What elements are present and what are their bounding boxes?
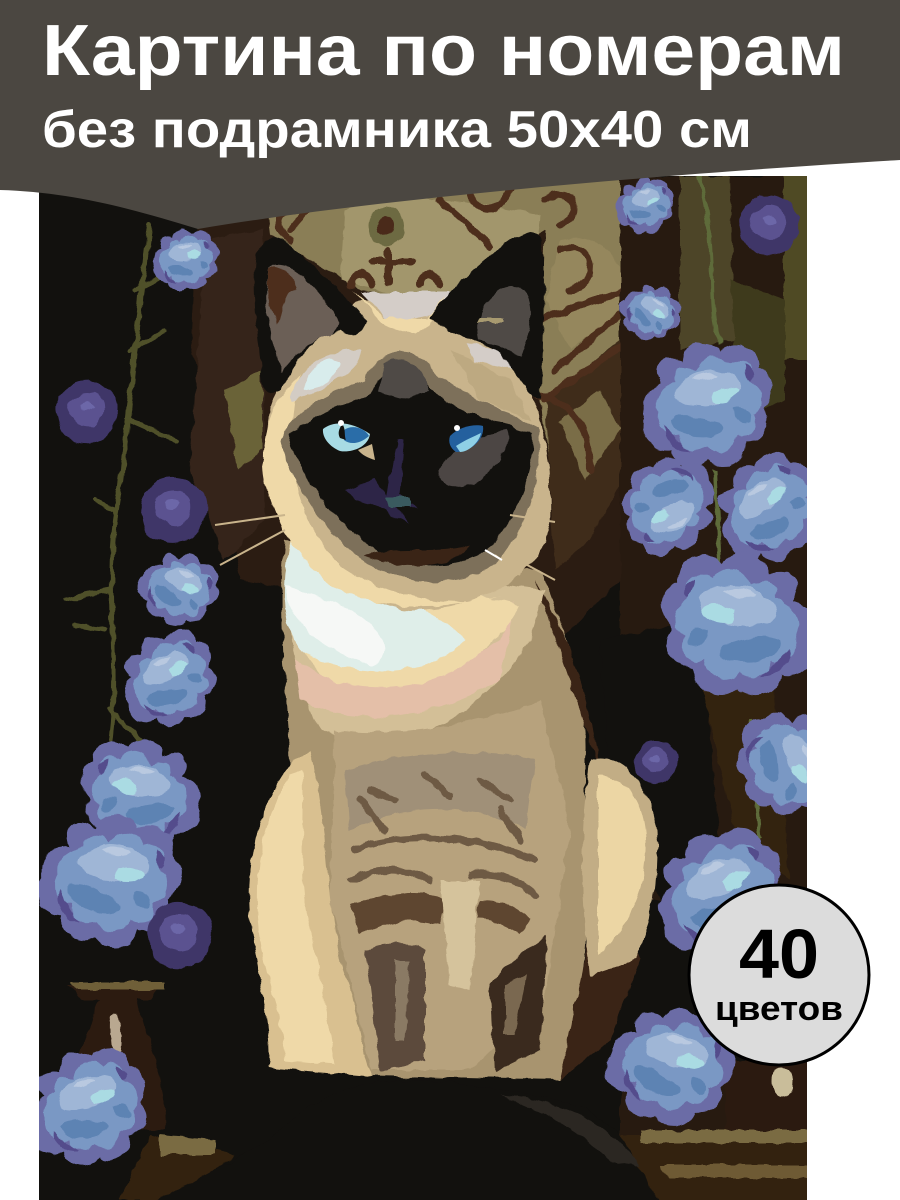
badge: 40 colours: 40 bbox=[739, 915, 819, 993]
header banner bbox=[0, 0, 900, 229]
right dark column with olive strip bbox=[618, 176, 807, 1136]
ornamental wall background bbox=[190, 176, 645, 640]
badge: 40 colours: цветов bbox=[715, 990, 843, 1028]
flowers right bbox=[604, 178, 807, 1126]
badge: 40 colours bbox=[689, 885, 869, 1065]
title: Картина по номерам bbox=[42, 11, 845, 91]
flowers left bbox=[39, 228, 220, 1166]
cat head fur bbox=[263, 290, 550, 610]
left vines bbox=[65, 225, 175, 740]
right ledge bbox=[610, 1130, 820, 1200]
cat eyes bbox=[323, 420, 483, 460]
cat whiskers bbox=[215, 515, 555, 580]
cat ears bbox=[254, 232, 544, 398]
cat face mask bbox=[280, 352, 539, 581]
subtitle: без подрамника 50х40 см bbox=[42, 101, 752, 159]
left vase and ledge bbox=[68, 982, 235, 1200]
cat body bbox=[120, 535, 670, 1200]
